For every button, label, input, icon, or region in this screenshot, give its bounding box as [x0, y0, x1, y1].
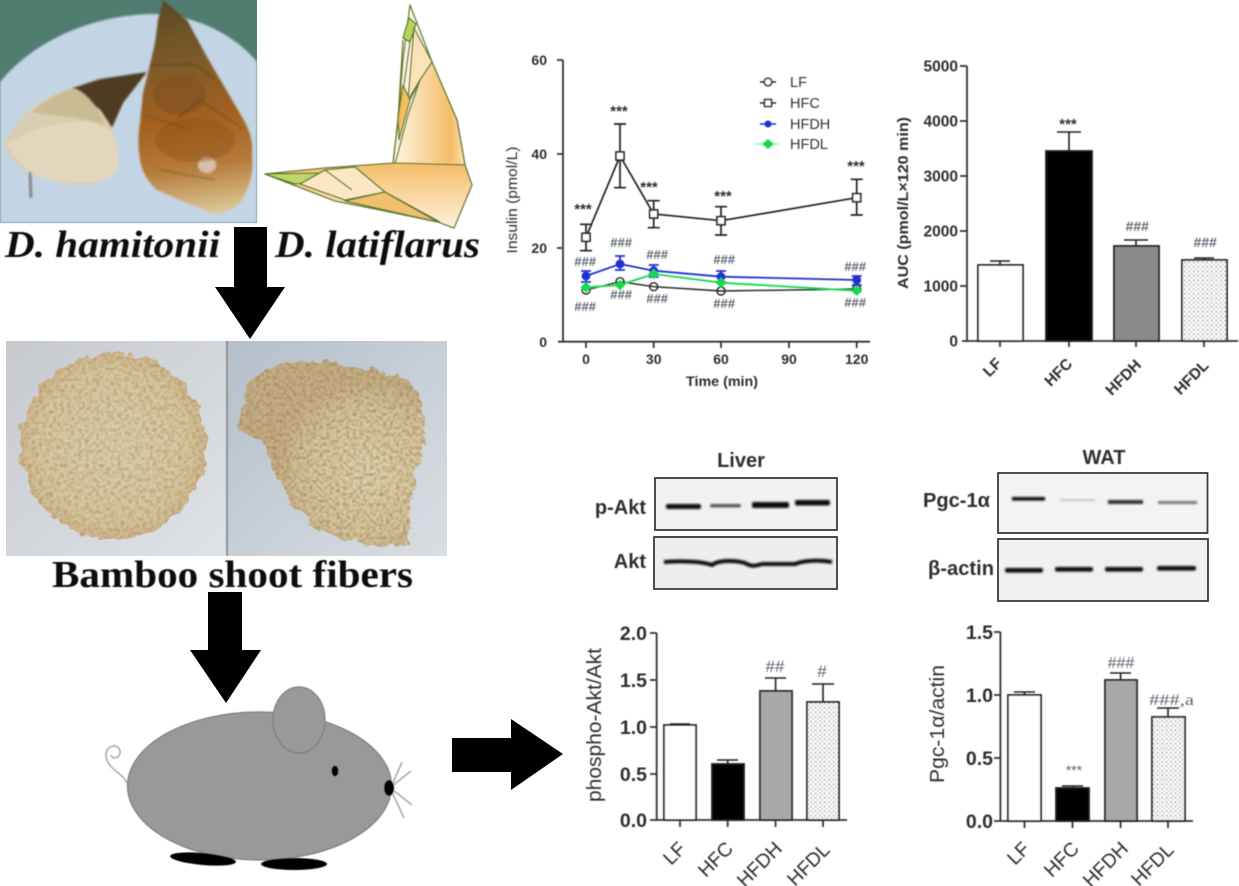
category labels: HFC	[694, 838, 738, 882]
photo: bamboo shoots D. hamitonii	[0, 0, 257, 223]
category labels: HFC	[1042, 356, 1076, 390]
significance marks ### upper	[574, 235, 867, 274]
series HFDL	[580, 269, 862, 296]
bar chart: Pgc-1a/actin	[927, 622, 1194, 886]
legend: HFDH	[790, 117, 830, 133]
y tick labels: 1.0	[620, 717, 647, 739]
y axis title: phospho-Akt/Akt	[584, 648, 606, 802]
blot p-Akt	[595, 478, 837, 530]
significance marks ***: ***	[714, 188, 732, 205]
blot p-Akt: p-Akt	[595, 497, 646, 519]
significance marks: #	[817, 662, 827, 681]
category labels: LF	[1003, 838, 1035, 870]
y tick labels: 0.5	[966, 748, 993, 770]
label: D. hamitonii: D. hamitonii	[4, 224, 220, 266]
significance marks ***	[574, 103, 865, 218]
significance marks ### lower	[574, 287, 867, 314]
arrow: mouse to results	[452, 719, 563, 790]
arrow: fibers to mouse	[190, 592, 261, 703]
category labels: HFC	[1040, 838, 1084, 882]
significance marks ### upper: ###	[713, 252, 736, 267]
y tick labels: 0	[949, 334, 958, 350]
legend: HFC	[790, 96, 820, 112]
y axis title: AUC (pmol/L×120 min)	[895, 117, 912, 289]
y tick labels: 0.0	[966, 811, 993, 833]
bars	[978, 151, 1227, 341]
category labels: HFDH	[1103, 357, 1145, 399]
photo: bamboo shoot fiber powder	[6, 341, 447, 556]
significance marks ### lower: ###	[574, 299, 597, 314]
y tick labels: 20	[531, 240, 547, 256]
significance marks: ##	[766, 657, 785, 676]
icon: mouse	[106, 687, 412, 870]
x tick labels	[582, 351, 869, 367]
category labels	[659, 838, 835, 886]
significance marks ***: ***	[610, 103, 628, 120]
significance marks	[1059, 116, 1217, 250]
significance marks ### lower: ###	[844, 295, 867, 310]
significance marks ***: ***	[574, 201, 592, 218]
y axis title: Insulin (pmol/L)	[505, 146, 521, 254]
blot beta-actin	[928, 539, 1208, 601]
blot beta-actin: β-actin	[928, 558, 994, 580]
error bars	[1014, 673, 1179, 788]
western blot: WAT	[923, 447, 1208, 601]
heading: WAT: WAT	[1083, 447, 1125, 469]
y tick labels: 4000	[924, 114, 958, 130]
axes	[650, 633, 847, 827]
right shoot, unpeeled	[138, 0, 252, 213]
series HFC	[580, 124, 863, 251]
significance marks: ***	[1066, 762, 1083, 778]
powder pile left	[20, 353, 206, 539]
significance marks ### lower: ###	[713, 296, 736, 311]
y tick labels: 5000	[924, 58, 958, 76]
bars	[664, 691, 839, 820]
category labels: HFDL	[1171, 357, 1212, 398]
x tick labels: 120	[845, 351, 869, 367]
line chart: insulin over time	[505, 52, 870, 389]
error bars	[990, 132, 1214, 265]
bar chart: AUC	[895, 58, 1238, 399]
y tick labels	[924, 58, 958, 350]
y tick labels: 0.5	[620, 764, 647, 786]
y tick labels: 0.0	[620, 810, 647, 832]
blot Pgc-1a	[923, 473, 1208, 533]
category labels	[980, 355, 1212, 399]
bar chart: phospho-Akt/Akt	[584, 623, 847, 886]
y tick labels	[966, 622, 993, 833]
blot Pgc-1a: Pgc-1α	[923, 490, 991, 512]
series HFDH	[581, 256, 862, 285]
legend: HFDL	[790, 137, 828, 153]
significance marks ***: ***	[847, 158, 865, 175]
x axis title: Time (min)	[686, 373, 758, 389]
y tick labels	[620, 623, 647, 832]
significance marks: ###	[1193, 234, 1217, 250]
x tick labels: 90	[781, 351, 797, 367]
x tick labels: 60	[713, 351, 729, 367]
significance marks: ###	[1125, 218, 1149, 234]
significance marks ### upper: ###	[610, 235, 633, 250]
legend	[754, 75, 830, 153]
x tick labels: 0	[582, 351, 590, 367]
axes	[557, 60, 870, 348]
label: D. latiflarus: D. latiflarus	[274, 224, 480, 266]
axes	[960, 66, 1238, 347]
label: Bamboo shoot fibers: Bamboo shoot fibers	[52, 554, 413, 596]
y tick labels: 2000	[924, 224, 958, 240]
illustration: bamboo shoot D. latiflarus	[265, 5, 472, 228]
y tick labels: 3000	[924, 168, 958, 186]
y tick labels: 60	[531, 52, 547, 68]
y tick labels: 1000	[924, 278, 958, 296]
y axis title: Pgc-1α/actin	[927, 665, 949, 783]
category labels: LF	[980, 355, 1006, 381]
axes	[994, 632, 1193, 828]
significance marks ***: ***	[640, 179, 658, 196]
significance marks ### lower: ###	[610, 287, 633, 302]
significance marks ### upper: ###	[844, 259, 867, 274]
significance marks	[766, 657, 827, 681]
category labels: LF	[659, 838, 691, 870]
arrow: shoots to fibers	[215, 227, 285, 339]
y tick labels: 2.0	[620, 623, 647, 645]
significance marks: ***	[1059, 116, 1077, 133]
significance marks ### upper: ###	[574, 254, 597, 269]
legend: LF	[790, 75, 807, 91]
x tick labels: 30	[646, 351, 662, 367]
y tick labels: 1.5	[620, 670, 647, 692]
significance marks: ###,a	[1149, 692, 1194, 709]
bars	[1008, 680, 1185, 821]
y tick labels: 1.5	[966, 622, 993, 644]
left shoot, peeled	[5, 72, 147, 198]
error bars	[670, 678, 834, 764]
western blot: Liver	[595, 450, 837, 589]
category labels	[1003, 838, 1179, 886]
significance marks	[1066, 655, 1194, 778]
y tick labels: 0	[539, 334, 547, 350]
y tick labels: 1.0	[966, 685, 993, 707]
heading: Liver: Liver	[717, 450, 765, 472]
blot Akt	[614, 537, 837, 589]
significance marks ### upper: ###	[646, 247, 669, 262]
blot Akt: Akt	[614, 551, 646, 573]
y tick labels: 40	[531, 146, 547, 162]
y tick labels	[531, 52, 547, 350]
significance marks: ###	[1108, 655, 1134, 672]
series LF	[582, 278, 861, 295]
powder pile right	[238, 361, 425, 546]
significance marks ### lower: ###	[646, 291, 669, 306]
